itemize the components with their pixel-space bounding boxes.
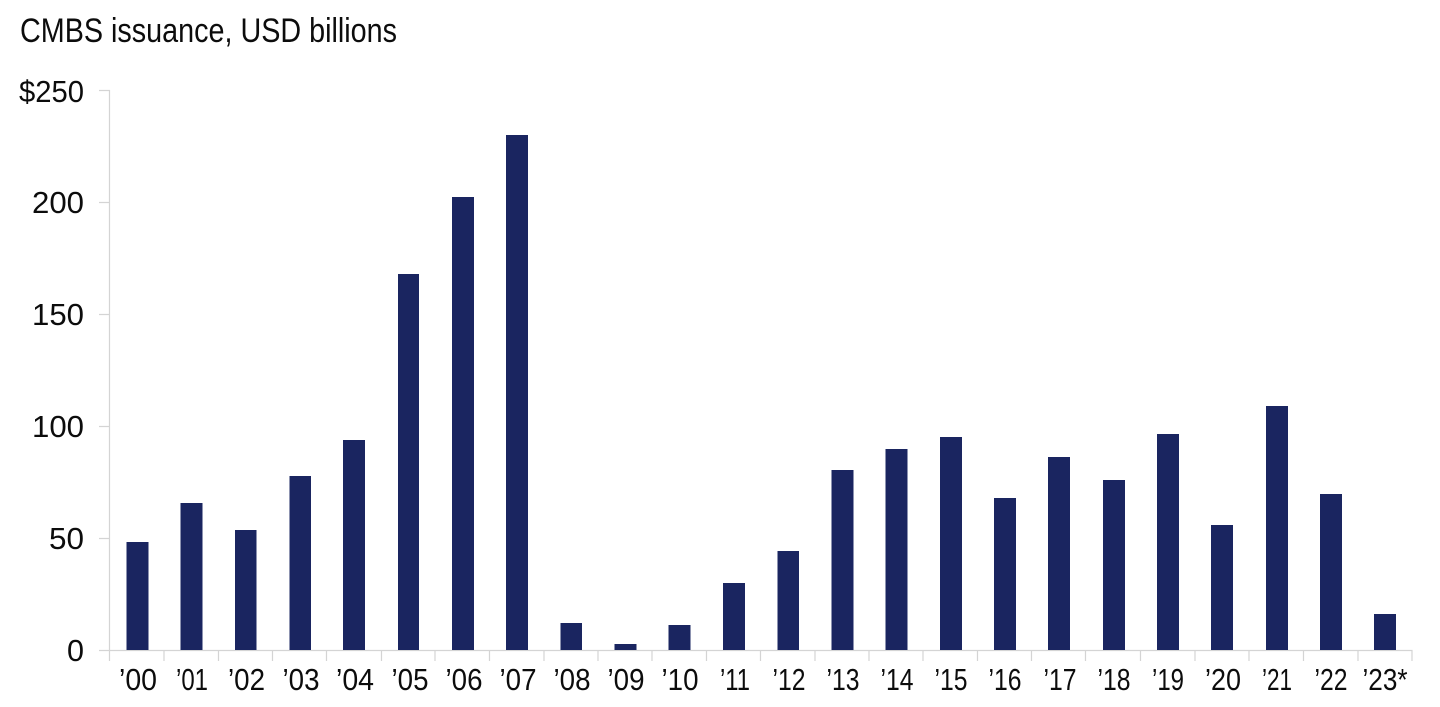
- x axis labels: ’18: [1098, 662, 1130, 697]
- title: CMBS issuance, USD billions: [20, 12, 397, 50]
- x axis labels: ’14: [880, 662, 914, 697]
- x axis labels: ’00: [119, 662, 157, 697]
- x axis labels: [119, 662, 1408, 697]
- x axis labels: ’05: [392, 662, 428, 697]
- x axis: [99, 650, 1412, 661]
- y axis labels: 200: [32, 185, 84, 220]
- x axis labels: ’15: [934, 662, 968, 697]
- x axis labels: ’09: [608, 662, 644, 697]
- x axis labels: ’22: [1314, 662, 1348, 697]
- x axis labels: ’20: [1205, 662, 1241, 697]
- x axis labels: ’11: [720, 662, 750, 697]
- x axis labels: ’19: [1152, 662, 1184, 697]
- y axis labels: [19, 74, 84, 668]
- y axis labels: $250: [19, 74, 84, 109]
- y axis: [99, 90, 110, 650]
- x axis labels: ’17: [1044, 662, 1076, 697]
- y axis labels: 100: [32, 409, 84, 444]
- y axis labels: 50: [49, 521, 84, 556]
- x axis labels: ’07: [500, 662, 536, 697]
- y axis labels: 150: [32, 297, 84, 332]
- x axis labels: ’06: [446, 662, 482, 697]
- x axis labels: ’02: [228, 662, 265, 697]
- x axis labels: ’13: [826, 662, 860, 697]
- x axis labels: ’23*: [1362, 662, 1408, 697]
- x axis labels: ’16: [988, 662, 1022, 697]
- x axis labels: ’01: [176, 662, 208, 697]
- bars: [126, 135, 1396, 650]
- x axis labels: ’03: [282, 662, 320, 697]
- x axis labels: ’12: [772, 662, 806, 697]
- x axis labels: ’04: [336, 662, 374, 697]
- y axis labels: 0: [67, 633, 84, 668]
- x axis labels: ’08: [554, 662, 590, 697]
- x axis labels: ’10: [662, 662, 698, 697]
- x axis labels: ’21: [1262, 662, 1292, 697]
